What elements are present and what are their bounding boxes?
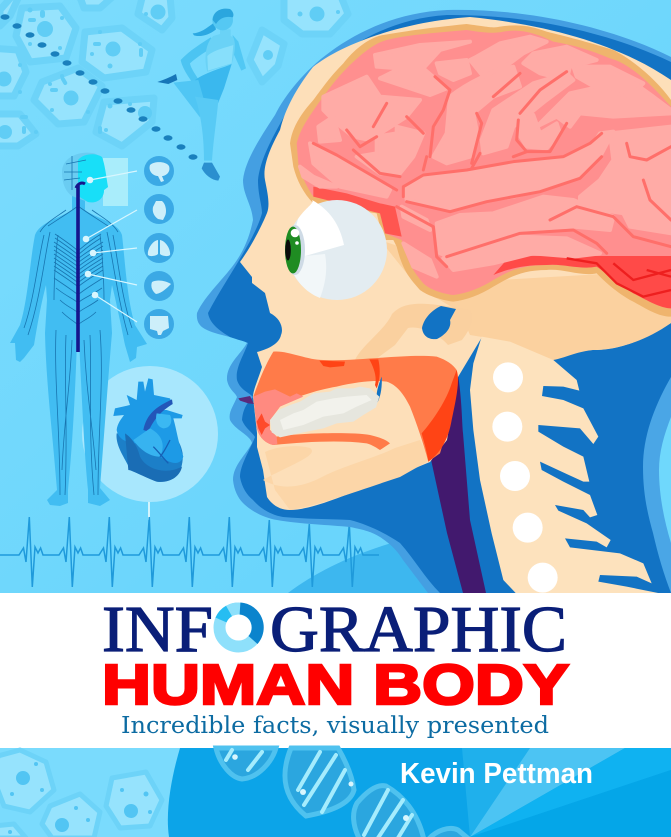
palate (319, 359, 380, 388)
sulci (313, 72, 671, 267)
DNA helix (216, 748, 470, 837)
cell pattern (0, 0, 348, 146)
eye highlight (290, 200, 344, 256)
pointer dots (83, 177, 98, 298)
fan rays (462, 748, 530, 837)
iris (285, 225, 305, 275)
subtitle: Incredible facts, visually presented (121, 713, 549, 739)
head (62, 153, 108, 202)
lobes (300, 37, 671, 277)
bottom blue field (168, 748, 671, 837)
body figure with nervous system (10, 153, 147, 506)
lip purple (238, 396, 254, 404)
icon: donut chart letter O (220, 608, 258, 646)
lower sulci (567, 258, 671, 297)
vertebra dots (492, 362, 558, 593)
spine (470, 337, 660, 593)
brain outer rim (290, 24, 671, 317)
skull and face (240, 17, 671, 510)
throat airway (430, 375, 486, 593)
right-side bulge (643, 377, 671, 593)
blue sliver (377, 377, 382, 403)
teeth (270, 387, 379, 437)
panel: background (0, 0, 671, 593)
title: INFOGRAPHIC: INF (102, 593, 213, 666)
title: INFOGRAPHIC (102, 593, 567, 666)
lower red zone (493, 256, 671, 308)
mouth and airway (238, 351, 458, 462)
lip pink gums (253, 389, 303, 445)
ECG heartbeat line (0, 517, 379, 587)
icon: brain (144, 156, 174, 186)
eye (285, 200, 387, 300)
dark throat overlap (422, 370, 458, 462)
brain base (297, 30, 671, 308)
jaw shade (263, 440, 430, 510)
icon: liver (144, 271, 174, 301)
nerve lines (24, 156, 132, 495)
title: INFOGRAPHIC: GRAPHIC (270, 593, 567, 666)
icon: heart organ (144, 194, 174, 224)
head highlight panel (103, 158, 128, 206)
frontal red zone (313, 187, 402, 237)
face highlight (78, 154, 108, 202)
inner dark blue (208, 15, 671, 593)
teeth highlights (280, 395, 372, 430)
author name: Kevin Pettman (400, 758, 593, 790)
ear canal hole (422, 306, 456, 339)
illustration: heart (113, 378, 183, 482)
body silhouette (10, 196, 147, 506)
icon: lungs (144, 233, 174, 263)
heart circle callout (82, 366, 218, 520)
title: HUMAN BODY: HUMAN BODY (102, 653, 569, 717)
brain (290, 24, 671, 317)
spinal cord (76, 185, 80, 352)
dotted route line (0, 14, 198, 160)
outer light band (197, 10, 671, 593)
pointer lines (86, 171, 137, 322)
bottom cells (0, 750, 162, 837)
gum spikes (257, 413, 270, 435)
panel: bottom band (0, 748, 671, 837)
icon: intestine (144, 309, 174, 339)
cheekbone shade (355, 304, 472, 362)
head profile outline (197, 10, 671, 593)
shaded skull base (380, 240, 671, 360)
white title band (0, 593, 671, 748)
icon: runner figure (157, 9, 246, 181)
shoulder shape (288, 540, 440, 593)
